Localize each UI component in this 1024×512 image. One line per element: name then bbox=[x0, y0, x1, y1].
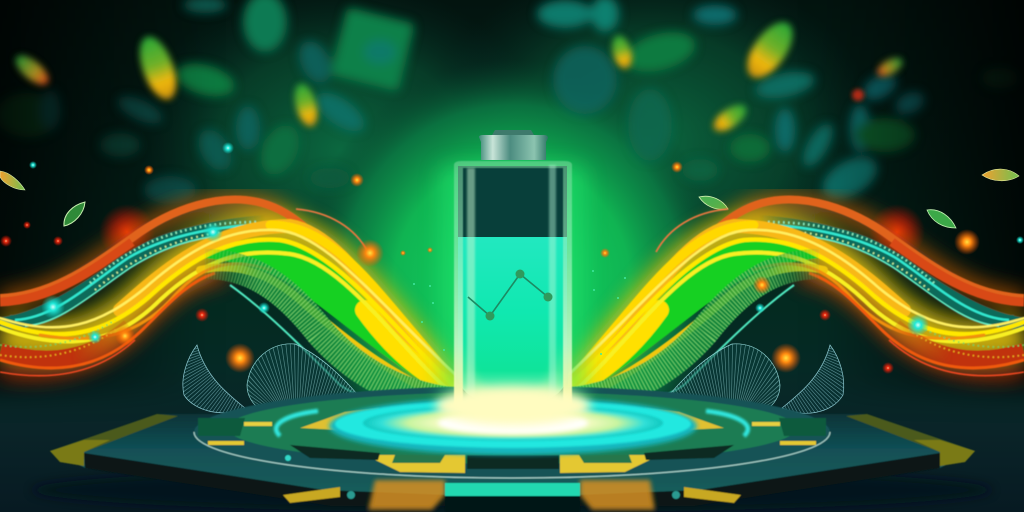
platform olive strip bbox=[50, 414, 178, 466]
fan: inner left bbox=[246, 344, 356, 406]
platform shadow bbox=[32, 468, 992, 512]
arc to spark bbox=[296, 209, 368, 252]
platform ring bbox=[194, 386, 830, 478]
floating particles bbox=[413, 270, 626, 355]
crisp small leaves bbox=[0, 169, 1019, 228]
leaf: orange blur bbox=[874, 54, 906, 80]
fan: inner right bbox=[671, 344, 780, 406]
leaf: far right bbox=[982, 169, 1019, 181]
battery dark chamber bbox=[458, 166, 567, 238]
leaf: outlined bbox=[64, 202, 85, 226]
battery bbox=[435, 130, 591, 426]
fan: outer left bbox=[182, 344, 245, 414]
orange top band bbox=[0, 200, 308, 298]
waves left bbox=[0, 200, 456, 408]
wave glow bbox=[0, 202, 456, 392]
cyan ring arcs bbox=[276, 411, 748, 436]
dots bbox=[285, 455, 291, 461]
green band fill bbox=[205, 241, 456, 402]
platform olive corners bbox=[50, 440, 110, 466]
mesh fans left bbox=[182, 344, 356, 414]
platform front centre bbox=[368, 480, 445, 510]
sparks bbox=[0, 142, 1024, 374]
mesh band bbox=[205, 264, 450, 402]
line chart bbox=[468, 270, 552, 320]
battery cap bbox=[479, 135, 548, 160]
waves right (mirrored) bbox=[568, 200, 1024, 408]
orange inner segments bbox=[300, 408, 380, 430]
leaf: right mid bbox=[709, 100, 751, 136]
yellow main strands bbox=[0, 225, 456, 403]
platform front faces bbox=[84, 453, 940, 512]
battery base glow bbox=[435, 386, 591, 426]
orange band left thick bbox=[0, 242, 132, 302]
platform yellow segments bbox=[208, 422, 816, 473]
battery walls bbox=[454, 161, 572, 405]
platform dark blocks bbox=[198, 418, 826, 469]
blurred accent leaves bbox=[11, 15, 906, 136]
leaf: right outlined bbox=[927, 210, 956, 228]
leaf: center left bbox=[291, 81, 321, 129]
battery liquid bbox=[458, 237, 567, 404]
leaf: far left orange bbox=[0, 171, 25, 190]
leaf: top right bbox=[739, 15, 801, 85]
red glows behind waves bbox=[99, 204, 925, 260]
battery knob bbox=[492, 130, 534, 135]
leaf: by arc bbox=[699, 196, 728, 209]
blurred foliage background bbox=[0, 0, 1018, 208]
battery highlights bbox=[467, 168, 475, 403]
platform bbox=[32, 386, 992, 512]
mesh fans right bbox=[662, 344, 849, 422]
orange lower band bbox=[0, 327, 130, 360]
platform top surface bbox=[50, 414, 975, 505]
battery glow bbox=[440, 165, 586, 400]
teal dotted band bbox=[0, 222, 265, 326]
leaf: far left bbox=[11, 50, 53, 90]
fan: outer right bbox=[782, 344, 844, 414]
side vignette bbox=[0, 0, 1024, 390]
leaf: center right bbox=[609, 33, 635, 71]
leaf: top left bbox=[133, 32, 183, 104]
red blur spot bbox=[852, 89, 864, 101]
glowing charging disc bbox=[329, 397, 697, 455]
